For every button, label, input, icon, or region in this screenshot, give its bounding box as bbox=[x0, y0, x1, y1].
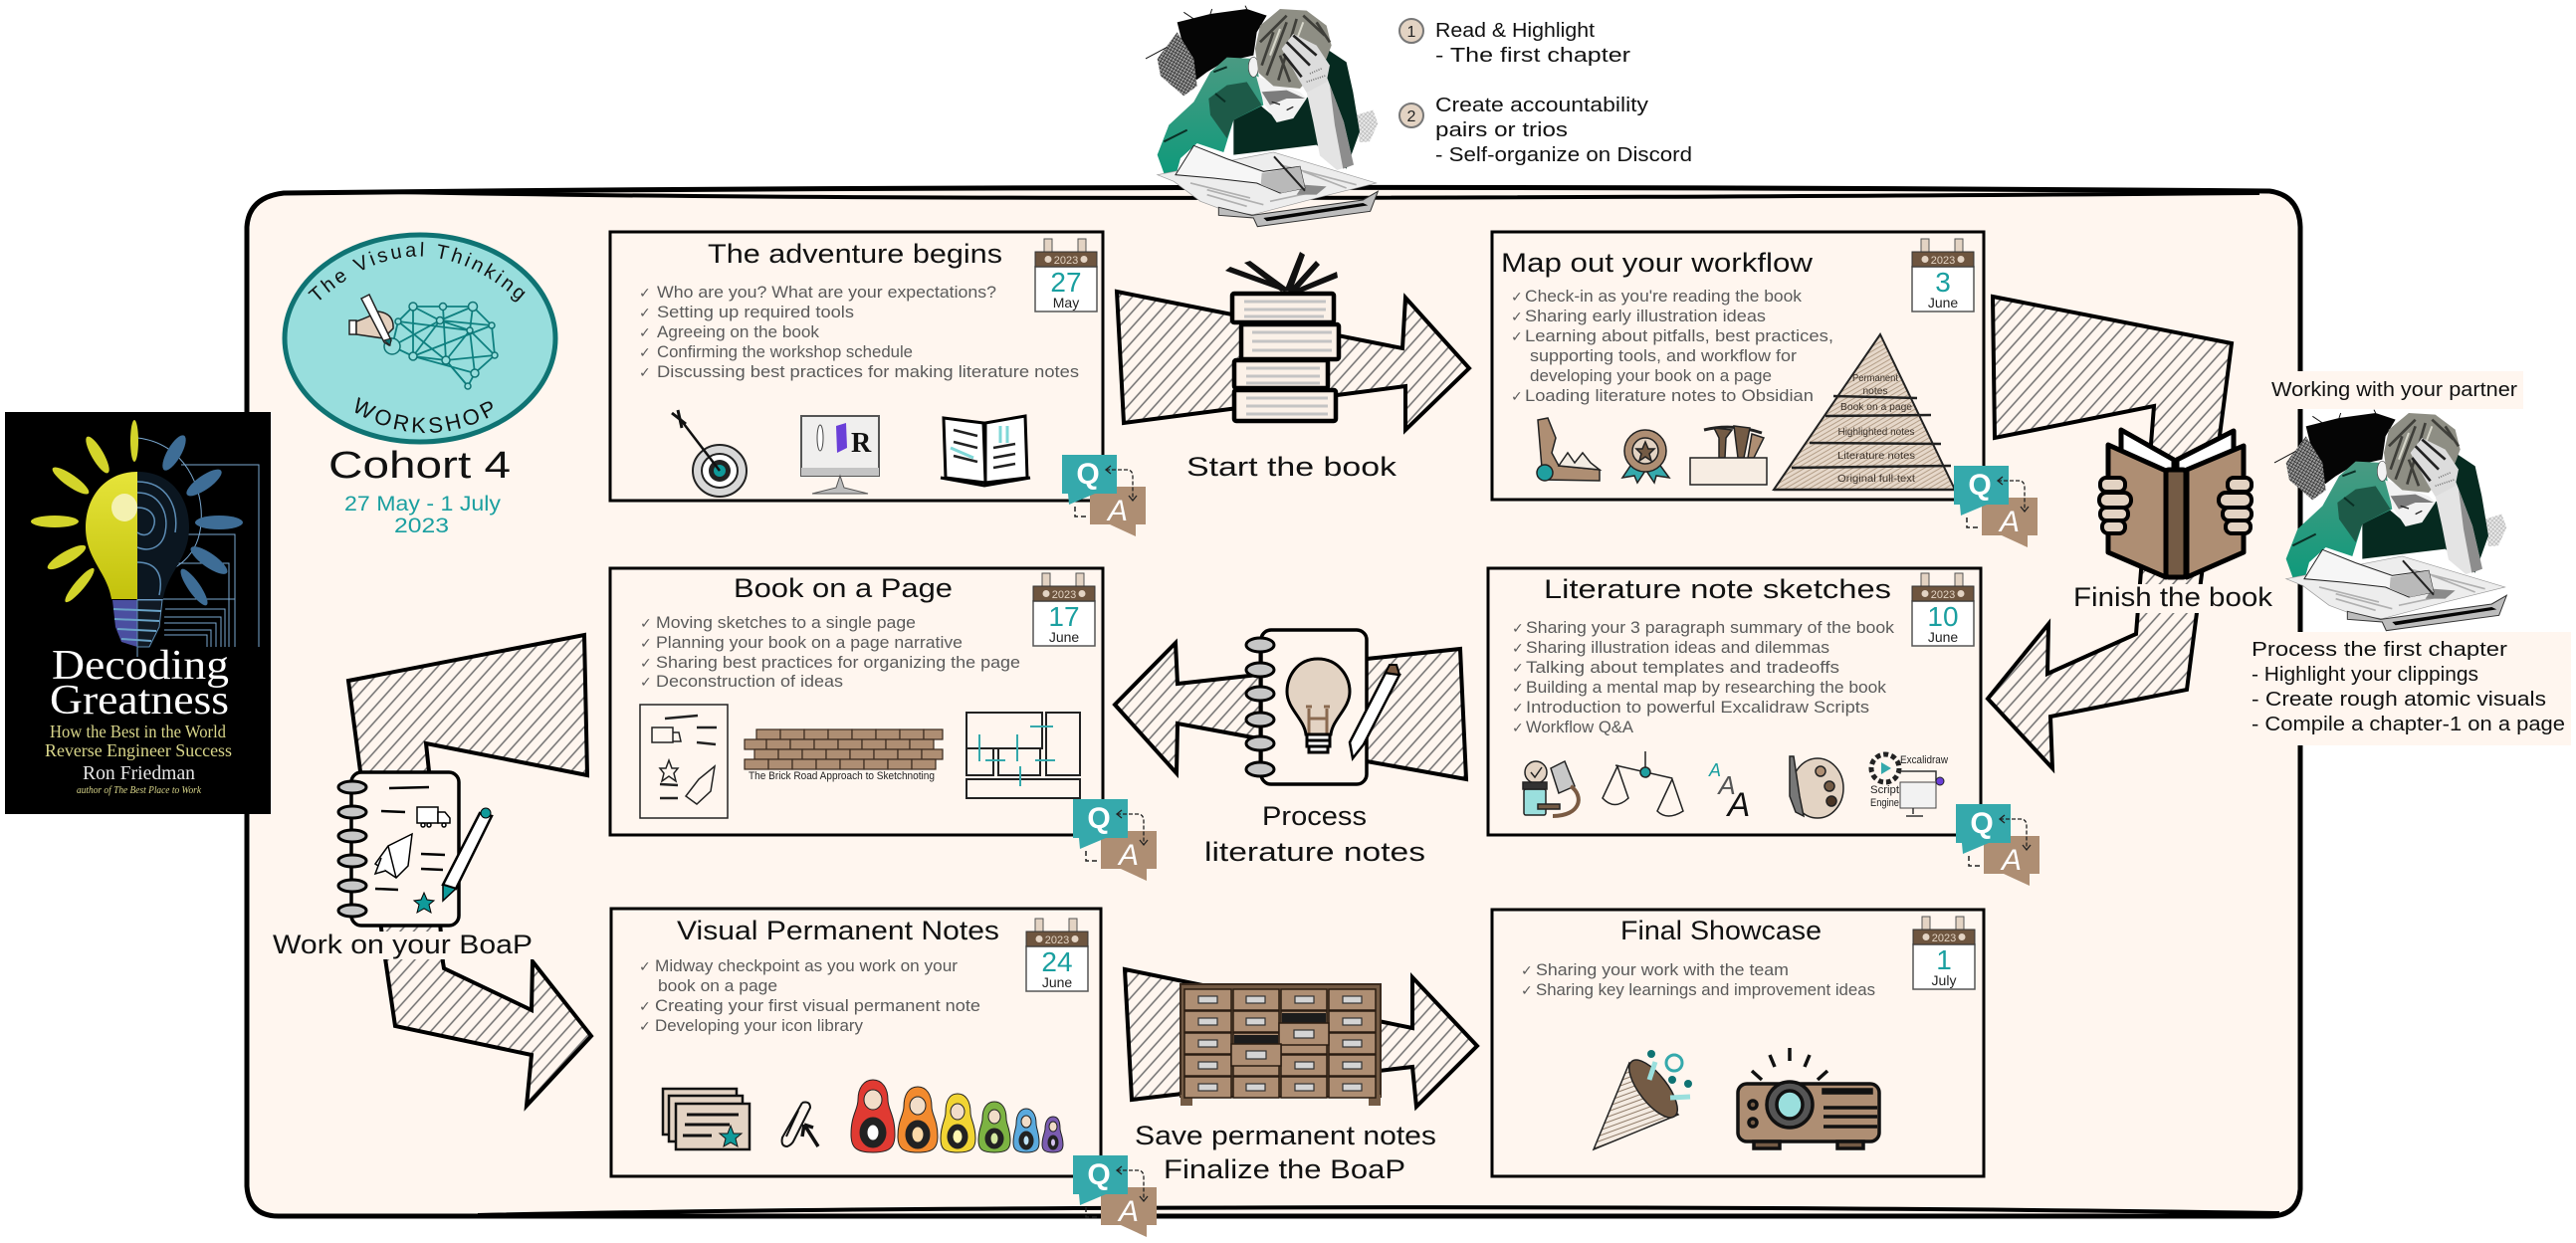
arrow: process literature notes bbox=[1115, 643, 1466, 779]
calendar: 27 May: 27 bbox=[1050, 267, 1082, 298]
checklist: Agreeing on the book bbox=[657, 322, 820, 341]
label: finish the book: Finish the book bbox=[2073, 582, 2273, 612]
checklist: ✓ bbox=[639, 364, 651, 380]
checklist: ✓ bbox=[1512, 720, 1524, 735]
note: working with your partner bbox=[2265, 371, 2523, 409]
chart: knowledge pyramid: Literature notes bbox=[1837, 451, 1915, 462]
calendar: 10 June: June bbox=[1928, 629, 1958, 645]
icon: Excalidraw Script Engine: Excalidraw bbox=[1900, 754, 1948, 766]
panel: the adventure begins bbox=[610, 232, 1146, 536]
book cover: Decoding Greatness: Greatness bbox=[50, 678, 229, 724]
checklist: ✓ bbox=[1511, 309, 1523, 324]
badge: questions and answers bbox=[1073, 1155, 1157, 1237]
icon: paperclip with cursor bbox=[782, 1103, 818, 1146]
checklist: ✓ bbox=[1511, 289, 1523, 305]
icon: target with arrow bbox=[672, 410, 747, 497]
badge: questions and answers: A bbox=[1117, 839, 1139, 872]
icon: nesting dolls bbox=[851, 1080, 1063, 1152]
checklist: Planning your book on a page narrative bbox=[656, 633, 963, 652]
calendar: 17 June: 2023 bbox=[1052, 589, 1076, 601]
cohort heading bbox=[328, 445, 511, 537]
calendar: 1 July: 1 bbox=[1936, 944, 1952, 975]
checklist: Discussing best practices for making literature notes bbox=[657, 362, 1079, 381]
label: save permanent notes, finalize the BoaP bbox=[1135, 1121, 1436, 1184]
badge: questions and answers: A bbox=[2000, 844, 2022, 877]
checklist: Sharing best practices for organizing the page bbox=[656, 653, 1020, 672]
checklist: book on a page bbox=[658, 976, 777, 995]
heading: Literature note sketches bbox=[1544, 574, 1891, 604]
checklist bbox=[1512, 618, 1895, 736]
cohort heading: 27 May - 1 July bbox=[344, 493, 502, 516]
checklist: Workflow Q&A bbox=[1526, 718, 1634, 736]
note: process the first chapter: Process the first chapter bbox=[2252, 639, 2507, 661]
checklist: Building a mental map by researching the book bbox=[1526, 678, 1886, 697]
top instructions: 1 bbox=[1407, 24, 1416, 41]
heading: Book on a Page bbox=[734, 573, 953, 603]
badge: questions and answers bbox=[1062, 455, 1146, 536]
badge: questions and answers: Q bbox=[1076, 458, 1100, 491]
checklist: Moving sketches to a single page bbox=[656, 613, 916, 632]
calendar: 24 June: 24 bbox=[1041, 946, 1073, 977]
checklist: ✓ bbox=[639, 998, 651, 1014]
badge: questions and answers: A bbox=[1117, 1195, 1139, 1228]
panel: final showcase bbox=[1492, 910, 1984, 1176]
book cover: Decoding Greatness bbox=[5, 412, 271, 814]
top instructions: pairs or trios bbox=[1435, 119, 1568, 141]
note: working with your partner: Working with your partner bbox=[2271, 379, 2517, 401]
arrow: start the book bbox=[1117, 292, 1469, 430]
icon: font sizes bbox=[1708, 760, 1750, 824]
checklist: ✓ bbox=[1521, 962, 1533, 978]
top instructions: 2 bbox=[1407, 108, 1416, 125]
checklist: Sharing early illustration ideas bbox=[1525, 307, 1766, 325]
checklist: developing your book on a page bbox=[1530, 366, 1772, 385]
book cover: Decoding Greatness: Ron Friedman bbox=[83, 762, 195, 784]
panel: map out your workflow bbox=[1492, 232, 2038, 547]
note: process the first chapter bbox=[2246, 632, 2571, 745]
checklist: ✓ bbox=[1512, 620, 1524, 636]
checklist: ✓ bbox=[1512, 660, 1524, 676]
label: process literature notes: Process bbox=[1262, 801, 1367, 831]
workshop logo: WORKSHOP bbox=[354, 397, 493, 434]
arrow: finish the book bbox=[1988, 297, 2232, 768]
checklist: ✓ bbox=[1512, 680, 1524, 696]
figure: person reading at top bbox=[1146, 6, 1378, 227]
checklist: Learning about pitfalls, best practices, bbox=[1525, 326, 1833, 345]
checklist bbox=[1521, 960, 1875, 999]
workshop logo bbox=[283, 233, 557, 444]
icon: Excalidraw Script Engine bbox=[1870, 754, 1948, 816]
note: process the first chapter: - Create rough atomic visuals bbox=[2252, 689, 2546, 711]
icon: font sizes: A bbox=[1708, 760, 1721, 780]
checklist: ✓ bbox=[639, 344, 651, 360]
calendar: 17 June: June bbox=[1049, 629, 1079, 645]
badge: questions and answers: Q bbox=[1087, 1158, 1111, 1191]
checklist: Creating your first visual permanent note bbox=[655, 996, 980, 1015]
label: process literature notes bbox=[1204, 801, 1425, 867]
icon: open book held in hands bbox=[2099, 430, 2252, 577]
chart: knowledge pyramid bbox=[1774, 334, 1955, 490]
icon: page layout bbox=[966, 713, 1080, 798]
checklist: Who are you? What are your expectations? bbox=[657, 283, 996, 302]
checklist: Sharing your work with the team bbox=[1536, 960, 1789, 979]
icon: party popper bbox=[1594, 1050, 1692, 1149]
icon: bear trap bbox=[1537, 418, 1600, 481]
calendar: 3 June bbox=[1912, 239, 1974, 311]
top instructions: Read & Highlight bbox=[1435, 20, 1595, 42]
checklist bbox=[640, 613, 1020, 691]
icon: toolbox bbox=[1690, 426, 1767, 485]
calendar: 17 June bbox=[1033, 573, 1095, 646]
checklist: Check-in as you're reading the book bbox=[1525, 287, 1802, 306]
icon: projector bbox=[1738, 1048, 1879, 1148]
checklist: ✓ bbox=[639, 305, 651, 320]
checklist: Midway checkpoint as you work on your bbox=[655, 956, 958, 975]
calendar: 17 June: 17 bbox=[1048, 601, 1080, 632]
panel: book on a page bbox=[610, 568, 1157, 881]
book cover: Decoding Greatness: Decoding bbox=[52, 643, 229, 689]
checklist: ✓ bbox=[639, 1018, 651, 1034]
checklist: ✓ bbox=[1511, 328, 1523, 344]
checklist: ✓ bbox=[1521, 982, 1533, 998]
calendar: 27 May: May bbox=[1053, 295, 1079, 311]
icon: paint palette bbox=[1790, 756, 1843, 818]
icon: balance scale bbox=[1603, 751, 1683, 816]
cohort heading: 2023 bbox=[394, 515, 449, 537]
checklist: ✓ bbox=[640, 615, 652, 631]
checklist: ✓ bbox=[1511, 388, 1523, 404]
chart: knowledge pyramid: Permanent bbox=[1852, 373, 1898, 384]
checklist: Introduction to powerful Excalidraw Scripts bbox=[1526, 698, 1869, 717]
panel: literature note sketches bbox=[1488, 568, 2039, 886]
calendar: 1 July bbox=[1913, 917, 1975, 989]
chart: knowledge pyramid: Highlighted notes bbox=[1837, 427, 1915, 438]
calendar: 3 June: 3 bbox=[1935, 267, 1951, 298]
workshop logo: The Visual Thinking bbox=[308, 242, 526, 303]
icon: medal bbox=[1622, 430, 1669, 483]
note: process the first chapter: - Highlight your clippings bbox=[2252, 664, 2478, 686]
badge: questions and answers: Q bbox=[1970, 807, 1994, 840]
icon: microscope bbox=[1523, 761, 1579, 816]
badge: questions and answers bbox=[1954, 466, 2038, 547]
icon: filing cabinet bbox=[1181, 984, 1381, 1106]
checklist: Talking about templates and tradeoffs bbox=[1526, 658, 1839, 677]
main workshop panel bbox=[247, 187, 2300, 1216]
icon: notebook with sketch bbox=[338, 772, 492, 926]
icon: monitor with apps bbox=[801, 416, 879, 494]
calendar: 24 June: 2023 bbox=[1045, 934, 1069, 946]
icon: open book bbox=[941, 416, 1030, 486]
checklist: supporting tools, and workflow for bbox=[1530, 346, 1797, 365]
calendar: 3 June: 2023 bbox=[1931, 255, 1955, 267]
icon: stack of books bbox=[1225, 252, 1339, 421]
top instructions bbox=[1399, 19, 1692, 166]
icon: brick wall bbox=[745, 729, 943, 782]
checklist: Sharing illustration ideas and dilemmas bbox=[1526, 638, 1829, 657]
checklist: Sharing your 3 paragraph summary of the book bbox=[1526, 618, 1895, 637]
icon: stack of note cards bbox=[663, 1089, 750, 1149]
checklist: ✓ bbox=[639, 958, 651, 974]
calendar: 27 May bbox=[1035, 239, 1097, 311]
heading: Visual Permanent Notes bbox=[677, 916, 999, 945]
checklist: ✓ bbox=[639, 285, 651, 301]
calendar: 10 June: 10 bbox=[1927, 601, 1959, 632]
icon: notebook with light bulb bbox=[1246, 630, 1399, 784]
calendar: 27 May: 2023 bbox=[1054, 255, 1078, 267]
icon: Excalidraw Script Engine: Engine bbox=[1870, 797, 1899, 809]
chart: knowledge pyramid: notes bbox=[1863, 386, 1887, 397]
checklist: ✓ bbox=[640, 655, 652, 671]
checklist: ✓ bbox=[640, 635, 652, 651]
calendar: 24 June bbox=[1026, 919, 1088, 991]
cohort heading: Cohort 4 bbox=[328, 445, 511, 487]
icon: Excalidraw Script Engine: Script bbox=[1870, 784, 1899, 796]
book cover: Decoding Greatness: author of The Best Place to Work bbox=[77, 785, 202, 796]
calendar: 10 June bbox=[1912, 573, 1974, 646]
badge: questions and answers bbox=[1956, 804, 2039, 886]
checklist: ✓ bbox=[640, 674, 652, 690]
checklist: Setting up required tools bbox=[657, 303, 854, 321]
label: save permanent notes, finalize the BoaP: Save permanent notes bbox=[1135, 1121, 1436, 1150]
top instructions: - The first chapter bbox=[1435, 45, 1630, 67]
heading: Map out your workflow bbox=[1501, 248, 1814, 278]
heading: Final Showcase bbox=[1620, 916, 1822, 945]
checklist: ✓ bbox=[1512, 700, 1524, 716]
note: process the first chapter: - Compile a chapter-1 on a page bbox=[2252, 714, 2565, 735]
badge: questions and answers: Q bbox=[1087, 802, 1111, 835]
checklist: Sharing key learnings and improvement ideas bbox=[1536, 980, 1875, 999]
badge: questions and answers: A bbox=[1998, 506, 2020, 538]
calendar: 3 June: June bbox=[1928, 295, 1958, 311]
checklist: Deconstruction of ideas bbox=[656, 672, 843, 691]
checklist: ✓ bbox=[1512, 640, 1524, 656]
checklist: ✓ bbox=[639, 324, 651, 340]
icon: monitor with apps: R bbox=[851, 428, 872, 459]
icon: page sketch bbox=[640, 705, 728, 818]
checklist: Loading literature notes to Obsidian bbox=[1525, 386, 1814, 405]
calendar: 1 July: 2023 bbox=[1932, 932, 1956, 944]
checklist bbox=[639, 283, 1079, 381]
label: work on your BoaP: Work on your BoaP bbox=[273, 930, 533, 959]
top instructions: - Self-organize on Discord bbox=[1435, 144, 1692, 166]
icon: font sizes: A bbox=[1726, 786, 1750, 824]
book cover: Decoding Greatness: How the Best in the World bbox=[50, 722, 226, 741]
checklist: Confirming the workshop schedule bbox=[657, 342, 913, 361]
icon: font sizes: A bbox=[1716, 770, 1736, 800]
calendar: 1 July: July bbox=[1932, 972, 1956, 988]
chart: knowledge pyramid: Book on a page bbox=[1840, 402, 1912, 413]
badge: questions and answers: Q bbox=[1968, 469, 1992, 502]
icon: brick wall: The Brick Road Approach to Sketchnoting bbox=[749, 770, 935, 782]
label: save permanent notes, finalize the BoaP: Finalize the BoaP bbox=[1164, 1154, 1405, 1184]
checklist: Developing your icon library bbox=[655, 1016, 863, 1035]
figure: person reading at right bbox=[2274, 410, 2506, 631]
badge: questions and answers: A bbox=[1106, 495, 1128, 527]
badge: questions and answers bbox=[1073, 799, 1157, 881]
heading: The adventure begins bbox=[708, 239, 1002, 269]
arrow: save permanent notes bbox=[1125, 969, 1477, 1107]
calendar: 10 June: 2023 bbox=[1931, 589, 1955, 601]
label: start the book: Start the book bbox=[1186, 452, 1397, 482]
arrow: work on your BoaP bbox=[348, 635, 591, 1106]
panel: visual permanent notes bbox=[611, 909, 1157, 1237]
checklist bbox=[1511, 287, 1833, 405]
top instructions: Create accountability bbox=[1435, 95, 1648, 116]
book cover: Decoding Greatness: Reverse Engineer Success bbox=[45, 740, 232, 760]
chart: knowledge pyramid: Original full-text bbox=[1837, 474, 1915, 485]
label: process literature notes: literature notes bbox=[1204, 837, 1425, 867]
calendar: 24 June: June bbox=[1042, 974, 1072, 990]
checklist bbox=[639, 956, 980, 1035]
